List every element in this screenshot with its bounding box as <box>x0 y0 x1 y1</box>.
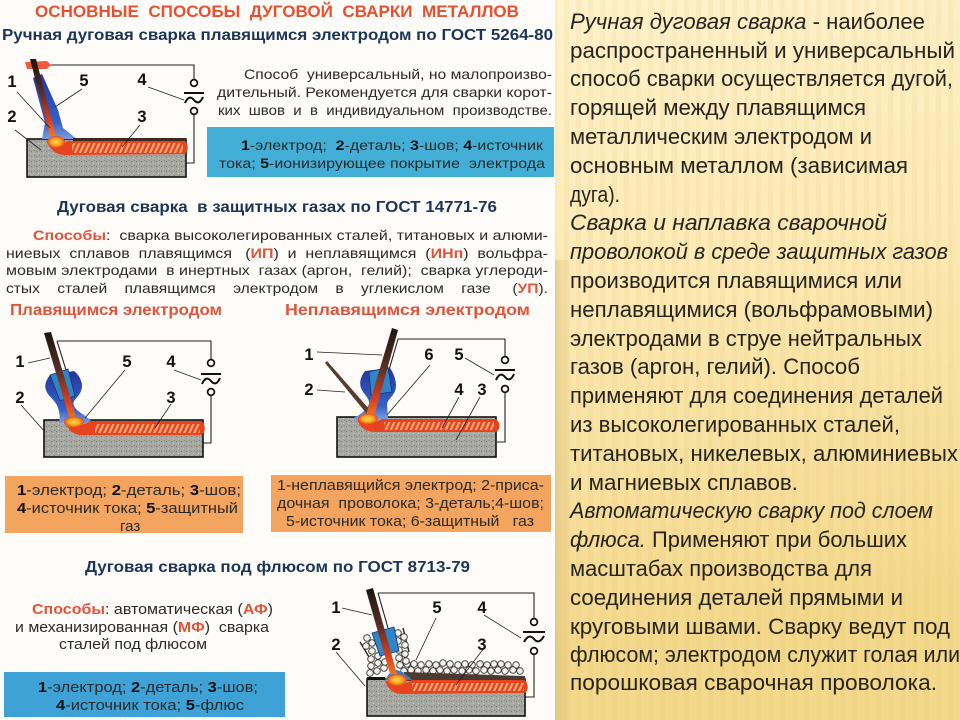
diagram: non-consumable electrode: 6 <box>424 346 434 364</box>
text block: right column explanation: металлическим электродом и <box>570 124 872 149</box>
text block: submerged arc methods: сталей под флюсом <box>59 636 207 653</box>
text block: submerged arc methods: Способы : автоматическая ( АФ) <box>32 601 273 618</box>
legend box: non-consumable electrode: 1-неплавящийся электрод; 2-приса- <box>277 477 544 494</box>
legend box: non-consumable electrode: 5-источник тока; 6-защитный газ <box>286 513 534 530</box>
text block: right column explanation: электродами в струе нейтральных <box>570 326 923 351</box>
text block: right column explanation: способ сварки осуществляется дугой, <box>570 66 953 91</box>
legend box: consumable electrode: газ <box>120 518 140 535</box>
diagram: consumable electrode: 3 <box>166 389 176 407</box>
diagram: consumable electrode: 2 <box>15 389 25 407</box>
legend box: submerged arc: 1-электрод; 2-деталь; 3-шов; <box>38 679 258 696</box>
text block: right column explanation: из высоколегированных сталей, <box>570 412 900 437</box>
heading: submerged arc welding: Дуговая сварка под флюсом по ГОСТ 8713-79 <box>85 559 470 576</box>
diagram: manual arc welding <box>7 59 204 177</box>
legend box: non-consumable electrode: дочная проволока; 3-деталь;4-шов; <box>277 495 544 512</box>
legend box: submerged arc: 4-источник тока; 5-флюс <box>56 697 245 714</box>
legend box: consumable electrode <box>5 476 243 535</box>
text block: shielded gas methods: стых сталей плавящимся электродом в углекислом газе ( УП). <box>6 280 548 296</box>
subheading: consumable electrode: Плавящимся электродом <box>10 302 222 319</box>
text block: right column explanation: основным металлом (зависимая <box>570 153 908 178</box>
diagram: submerged arc welding: 5 <box>432 599 442 617</box>
text block: right column explanation: дуга). <box>570 182 620 207</box>
text block: right column explanation <box>568 9 960 695</box>
diagram: submerged arc welding: 4 <box>477 599 487 617</box>
text block: right column explanation: соединения деталей прямыми и <box>570 585 903 610</box>
text block: right column explanation: порошковая сварочная проволока. <box>570 670 937 695</box>
text block: right column explanation: Сварка и наплавка сварочной <box>570 210 887 235</box>
diagram: non-consumable electrode: 1 <box>304 346 314 364</box>
diagram: consumable electrode: 5 <box>122 353 132 371</box>
diagram: submerged arc welding: 1 <box>331 599 341 617</box>
text block: manual welding description: дительный. Рекомендуется для сварки корот- <box>217 84 552 100</box>
text block: submerged arc methods <box>15 601 273 653</box>
text block: manual welding description: Способ универсальный, но малопроизво- <box>244 66 552 82</box>
diagram: manual arc welding: 4 <box>137 71 147 89</box>
diagram: non-consumable electrode: 4 <box>454 381 464 399</box>
diagram: consumable electrode <box>15 332 221 457</box>
text block: right column explanation: Ручная дуговая сварка - наиболее <box>570 9 925 34</box>
text block: manual welding description <box>217 66 552 118</box>
text block: right column explanation: проволокой в среде защитных газов <box>570 239 948 264</box>
text block: right column explanation: круговыми швами. Сварку ведут под <box>570 614 950 639</box>
text block: shielded gas methods: ниевых сплавов плавящимся ( ИП) и неплавящимся ( ИНп ) вольфра- <box>6 245 548 261</box>
legend box: consumable electrode: 1-электрод; 2-деталь; 3-шов; <box>17 482 241 499</box>
text block: right column explanation: производится плавящимися или <box>570 268 902 293</box>
diagram: non-consumable electrode: 2 <box>304 381 314 399</box>
text block: shielded gas methods <box>6 227 548 296</box>
diagram: submerged arc welding: 2 <box>331 636 341 654</box>
text block: right column explanation: газов (аргон, гелий). Способ <box>570 354 860 379</box>
heading: shielded gas welding: Дуговая сварка в защитных газах по ГОСТ 14771-76 <box>57 199 497 216</box>
text block: right column explanation: и магниевых сплавов. <box>570 470 798 495</box>
text block: right column explanation: распространенный и универсальный <box>570 38 955 63</box>
text block: submerged arc methods: и механизированная ( МФ) сварка <box>15 619 270 636</box>
text block: right column explanation: флюса. Применяют при больших <box>570 527 908 552</box>
diagram: consumable electrode: 1 <box>15 353 25 371</box>
diagram: manual arc welding: 5 <box>79 72 89 90</box>
panel: scanned welding poster <box>0 0 555 720</box>
text block: right column explanation: горящей между плавящимся <box>570 95 866 120</box>
diagram: submerged arc welding: 3 <box>477 636 487 654</box>
text block: shielded gas methods: мовым электродами в инертных газах (аргон, гелий); сварка углероди- <box>6 262 548 278</box>
legend box: submerged arc <box>4 672 285 717</box>
diagram: consumable electrode: 4 <box>166 353 176 371</box>
diagram: manual arc welding: 2 <box>7 108 17 126</box>
text block: shielded gas methods: Способы : сварка высоколегированных сталей, титановых и алюми- <box>33 227 548 243</box>
diagram: submerged arc welding <box>331 588 545 716</box>
legend box: manual welding: 1-электрод; 2-деталь; 3-шов; 4-источник <box>241 137 544 153</box>
text block: right column explanation: титановых, никелевых, алюминиевых <box>570 441 959 466</box>
legend box: manual welding: тока; 5-ионизирующее покрытие электрода <box>219 155 545 171</box>
title: ОСНОВНЫЕ СПОСОБЫ ДУГОВОЙ СВАРКИ МЕТАЛЛОВ <box>35 2 519 21</box>
diagram: manual arc welding: 3 <box>137 108 147 126</box>
heading: manual arc welding: Ручная дуговая сварка плавящимся электродом по ГОСТ 5264-80 <box>2 27 553 44</box>
diagram: non-consumable electrode: 5 <box>454 346 464 364</box>
text block: right column explanation: Автоматическую сварку под слоем <box>568 498 933 523</box>
legend box: non-consumable electrode <box>271 475 551 532</box>
subheading: non-consumable electrode: Неплавящимся электродом <box>285 302 530 319</box>
diagram: non-consumable electrode <box>304 328 515 457</box>
text block: manual welding description: ких швов и в индивидуальном производстве. <box>218 102 552 118</box>
diagram: non-consumable electrode: 3 <box>477 381 487 399</box>
legend box: consumable electrode: 4-источник тока; 5-защитный <box>17 500 238 517</box>
legend box: manual welding <box>207 127 554 177</box>
text block: right column explanation: применяют для соединения деталей <box>570 383 943 408</box>
diagram: manual arc welding: 1 <box>7 73 17 91</box>
text block: right column explanation: масштабах производства для <box>570 556 872 581</box>
text block: right column explanation: неплавящимися (вольфрамовыми) <box>570 297 933 322</box>
